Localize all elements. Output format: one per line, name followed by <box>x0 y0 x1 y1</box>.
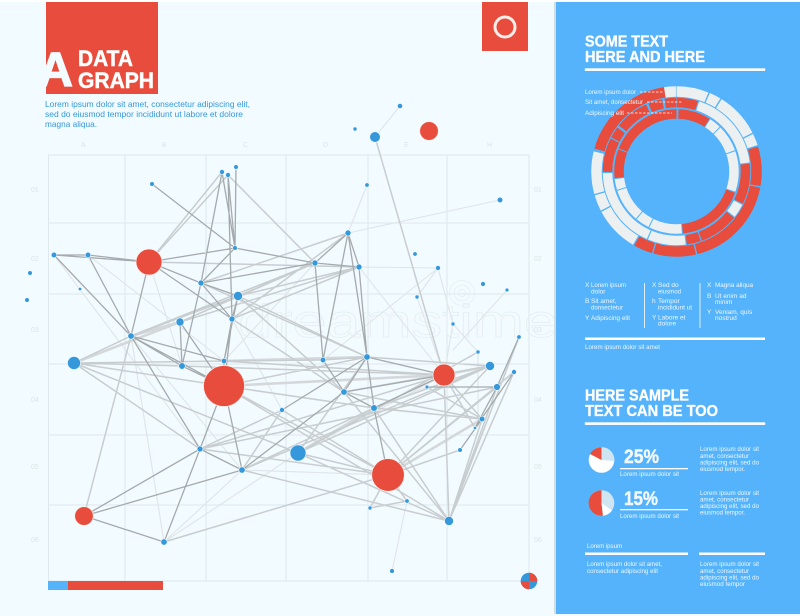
legend: h <box>652 298 656 305</box>
intro text: sed do eiusmod tempor incididunt ut labore et dolore <box>45 109 243 119</box>
watermark <box>238 280 558 347</box>
stat: 25%: amet, consectetur <box>700 453 750 460</box>
footer column right: adipiscing elit, sed do <box>700 574 759 582</box>
network nodes: blue <box>25 103 521 573</box>
stat: 15%: eiusmod tempor. <box>700 510 745 516</box>
legend: Y <box>652 314 657 322</box>
stat: 15%: Lorem ipsum dolor sit <box>700 490 759 497</box>
pie chart 15 <box>589 490 614 516</box>
axis labels: 06 <box>534 537 542 544</box>
legend: Veniam, quis <box>715 309 753 316</box>
heading: here sample <box>585 388 765 425</box>
heading: some text: SOME TEXT <box>585 34 668 50</box>
legend: Ut enim ad <box>715 293 747 300</box>
legend: Adipiscing elit <box>591 315 630 322</box>
stat: 25%: Lorem ipsum dolor sit <box>700 446 759 453</box>
axis labels: E <box>404 142 409 149</box>
legend: Sed do <box>658 282 679 289</box>
title block: GRAPH <box>78 68 154 93</box>
ring chart labels: Lorem ipsum dolor <box>585 89 637 96</box>
legend: Y <box>707 309 712 316</box>
inner ring <box>619 114 734 229</box>
stat: 15%: 15% <box>624 489 658 510</box>
legend: nostrud <box>715 315 737 322</box>
heading: here sample: TEXT CAN BE TOO <box>585 403 718 420</box>
watermark: dreamstime <box>238 295 558 347</box>
stat: 25%: Lorem ipsum dolor sit <box>620 471 679 478</box>
stat: 25%: adipiscing elit, sed do <box>700 460 759 466</box>
panel: right sidebar <box>554 2 800 614</box>
legend: X <box>585 282 590 289</box>
stat: 15% <box>589 489 759 520</box>
faint edges <box>54 106 507 571</box>
title block: DATA <box>78 46 133 71</box>
light edges <box>74 137 519 542</box>
ring chart labels: Sit amet, donsectetur <box>585 99 644 106</box>
axis labels: 03 <box>31 327 39 334</box>
legend <box>585 282 753 328</box>
footer column left: Lorem ipsum <box>587 543 622 550</box>
intro text <box>45 99 250 129</box>
stat: 25%: 25% <box>624 447 659 468</box>
legend: incididunt ut <box>658 304 692 312</box>
footer column right <box>699 552 765 588</box>
ring chart labels <box>585 89 682 117</box>
title block <box>38 2 158 97</box>
axis labels: 05 <box>31 464 39 471</box>
progress bar <box>48 581 163 590</box>
outer ring <box>596 92 756 252</box>
chart grid <box>48 155 529 581</box>
legend: dolore <box>658 320 676 328</box>
axis labels: 01 <box>534 187 542 194</box>
axis labels: 06 <box>31 537 39 544</box>
axis labels: A <box>81 142 86 149</box>
footer column right: eiusmod tempor <box>700 581 746 588</box>
axis labels: D <box>323 142 328 149</box>
legend: X <box>652 282 657 289</box>
thick pale bands <box>74 322 490 475</box>
axis labels: C <box>243 142 248 149</box>
legend: B <box>707 293 711 300</box>
dark edges <box>54 167 519 542</box>
pie chart 25 <box>589 447 614 473</box>
heading: some text <box>585 34 765 71</box>
legend: eiusmod <box>658 288 681 296</box>
icon: ring badge <box>482 2 528 51</box>
ring chart <box>596 92 756 252</box>
legend: Y <box>585 315 590 322</box>
axis labels: 05 <box>534 464 542 471</box>
legend: Lorem ipsum <box>591 282 626 289</box>
legend footer: Lorem ipsum dolor sit amet <box>585 344 660 351</box>
legend: donsectetur <box>591 304 624 312</box>
legend: minim <box>715 299 732 306</box>
footer column right: Lorem ipsum dolor sit <box>700 561 759 568</box>
legend: X <box>707 282 712 289</box>
stat: 25% <box>589 446 759 478</box>
intro text: Lorem ipsum dolor sit amet, consectetur adipiscing elit, <box>45 99 250 109</box>
stat: 15%: Lorem ipsum dolor sit <box>620 513 679 520</box>
heading: here sample: HERE SAMPLE <box>585 388 689 404</box>
axis labels: 01 <box>31 187 39 194</box>
middle ring <box>608 102 746 240</box>
network edges <box>54 106 519 571</box>
legend: Tempor <box>658 298 681 305</box>
stat: 15%: amet, consectetur <box>700 496 750 504</box>
axis labels: 04 <box>534 397 542 404</box>
corner pie <box>521 573 537 589</box>
legend: B <box>585 298 589 305</box>
legend: dolor <box>591 288 606 296</box>
footer column left <box>585 543 688 575</box>
heading: some text: HERE AND HERE <box>585 49 705 66</box>
stat: 15%: adipiscing elit, sed do <box>700 503 759 510</box>
axis labels: H <box>487 142 492 149</box>
footer column left: Lorem ipsum dolor sit amet, <box>587 561 662 568</box>
axis labels: 03 <box>534 327 542 334</box>
intro text: magna aliqua. <box>45 119 97 129</box>
footer column left: consectetur adipiscing elit <box>587 568 658 575</box>
axis labels <box>31 142 542 544</box>
ring chart labels: Adipiscing elit <box>585 110 624 117</box>
network nodes: red <box>75 122 455 525</box>
legend: Magna aliqua <box>715 282 753 289</box>
legend: Sit amet, <box>591 298 617 305</box>
stat: 25%: eiusmod tempor. <box>700 466 745 473</box>
footer column right: amet, consectetur <box>700 568 750 575</box>
title block: A <box>38 44 73 97</box>
axis labels: B <box>162 142 167 149</box>
axis labels: 02 <box>534 256 542 263</box>
axis labels: 04 <box>31 397 39 404</box>
axis labels: 02 <box>31 256 39 263</box>
legend: Labore et <box>658 314 686 322</box>
